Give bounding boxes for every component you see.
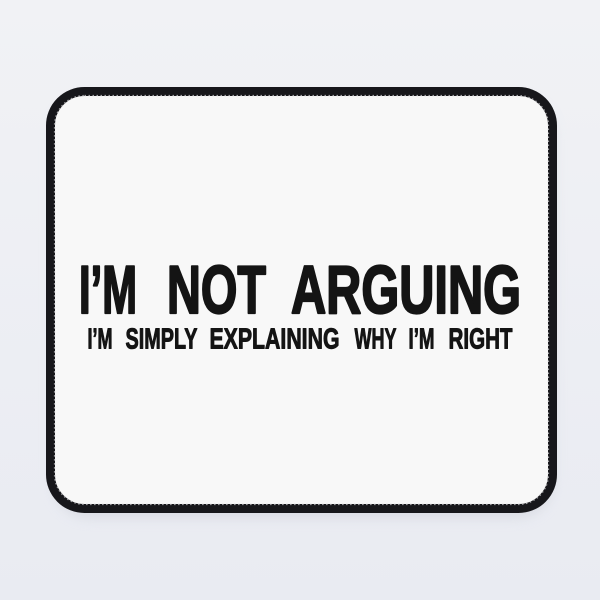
headline — [79, 252, 521, 328]
subheading: EXPLAINING — [210, 324, 340, 356]
pad surface with black stitched border — [50, 92, 552, 508]
subheading: WHY — [354, 324, 396, 356]
subheading — [88, 324, 513, 356]
subheading: RIGHT — [448, 324, 513, 356]
subheading: SIMPLY — [126, 324, 198, 356]
subheading: I’M — [408, 324, 434, 356]
headline: I’M — [79, 252, 137, 328]
headline: NOT — [167, 252, 266, 328]
subheading: I’M — [88, 324, 112, 356]
pad shadow — [52, 98, 554, 518]
stitching detail — [54, 96, 548, 504]
mouse pad — [50, 92, 554, 518]
